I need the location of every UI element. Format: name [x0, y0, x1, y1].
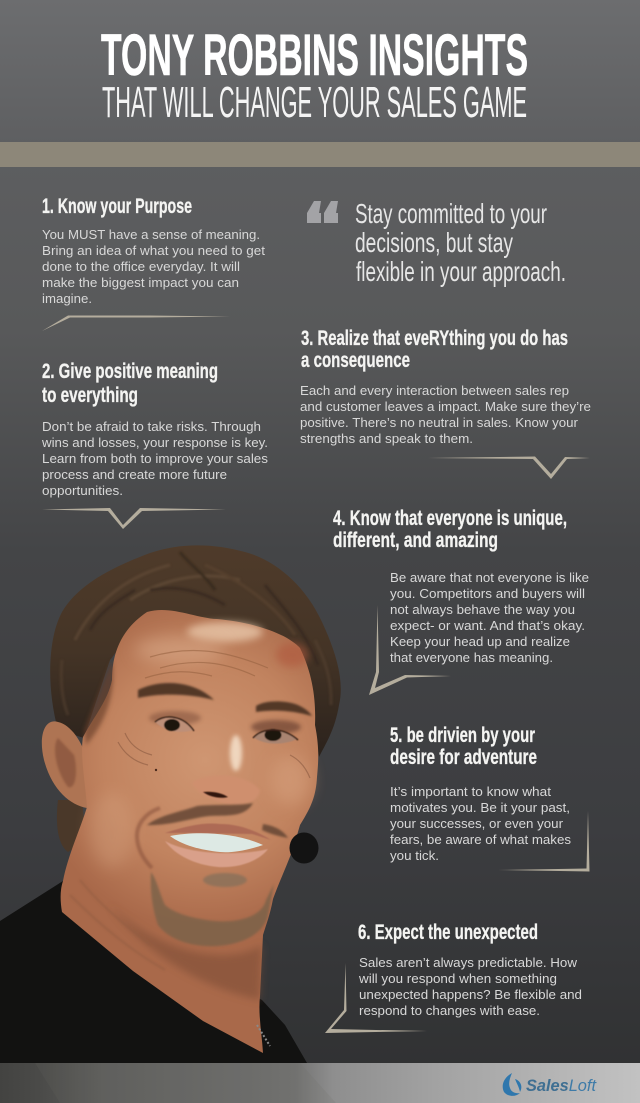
panel: 2 give positive meaning: Don’t be afraid to take risks. Through: [42, 420, 261, 434]
panel: 4 everyone is unique: not always behave the way you: [390, 603, 575, 617]
left eye: [155, 717, 194, 732]
upper lip: [165, 823, 271, 840]
panel: 5 desire for adventure: motivates you. Be it your past,: [390, 801, 570, 815]
back hair: [57, 800, 86, 852]
header band: [0, 142, 640, 167]
right cheek: [270, 755, 310, 805]
panel: 4 everyone is unique: different, and amazing: [333, 529, 498, 552]
face and neck skin: [61, 610, 318, 1053]
panel: 3 realize everything has a consequence: [300, 327, 591, 479]
panel: 5 desire for adventure: It’s important to know what: [390, 785, 552, 799]
footer portrait ghost: [35, 1063, 336, 1103]
panel: 3 realize everything has a consequence: Each and every interaction between sales rep: [300, 384, 569, 398]
SalesLoft logo: SalesLoft: [526, 1076, 597, 1095]
necklace: [257, 1025, 270, 1046]
panel: 5 desire for adventure: you tick.: [390, 849, 439, 863]
temple shadow: [84, 660, 113, 745]
under-chin shadow: [110, 905, 262, 1000]
pull quote: Stay committed to your: [355, 198, 547, 229]
panel: 1 know your purpose: done to the office everyday. It will: [42, 260, 240, 274]
eye sockets: [149, 711, 201, 725]
panel: 4 everyone is unique: Be aware that not everyone is like: [390, 571, 589, 585]
hair: [50, 545, 341, 757]
panel: 2 give positive meaning: wins and losses, your response is key.: [41, 436, 268, 450]
panel: 6 expect the unexpected: Sales aren’t always predictable. How: [359, 956, 578, 970]
title: [101, 23, 528, 127]
nostrils: [203, 792, 228, 798]
panel: 2 give positive meaning: Learn from both to improve your sales: [42, 452, 268, 466]
pull quote: [355, 198, 566, 287]
panel: 6 expect the unexpected: respond to changes with ease.: [359, 1004, 540, 1018]
right eye: [253, 729, 298, 744]
panel: 2 give positive meaning: process and create more future: [42, 468, 227, 482]
mustache: [147, 803, 253, 825]
panel: 4 everyone is unique: Keep your head up and realize: [390, 635, 570, 649]
forehead glow: [135, 636, 225, 664]
forehead highlight: [187, 622, 263, 642]
panel: 2 give positive meaning: to everything: [42, 384, 138, 407]
panel: 6 expect the unexpected: 6. Expect the unexpected: [358, 921, 538, 944]
panel: 4 everyone is unique: [333, 507, 589, 695]
stubble goatee: [151, 872, 274, 946]
neck lines: [70, 880, 165, 970]
panel: 6 expect the unexpected: [325, 921, 582, 1033]
panel: 5 desire for adventure: [390, 724, 590, 872]
temple red: [276, 643, 308, 667]
lower lip: [165, 841, 268, 867]
nose highlight: [230, 735, 242, 771]
panel: 5 desire for adventure: your successes, or even your: [390, 817, 563, 831]
panel: 3 realize everything has a consequence: positive. There’s no neutral in sales. Know your: [300, 416, 578, 430]
icon: droplet: [503, 1073, 521, 1096]
panel: 4 everyone is unique: you. Competitors and buyers will: [390, 587, 585, 601]
smile crease: [137, 808, 160, 868]
panel: 5 desire for adventure: desire for adventure: [390, 746, 537, 769]
lower-left cheek light: [90, 792, 134, 868]
panel: 4 everyone is unique: expect- or want. And that’s okay.: [390, 619, 585, 633]
panel: 1 know your purpose: You MUST have a sense of meaning.: [42, 228, 260, 242]
microphone: [290, 832, 318, 864]
panel: 1 know your purpose: 1. Know your Purpose: [42, 195, 192, 218]
panel: 3 realize everything has a consequence: and customer leaves a impact. Make sure they’re: [300, 400, 591, 414]
hair strands: [61, 552, 331, 715]
panel: 6 expect the unexpected: will you respond when something: [358, 972, 557, 986]
panel: 5 desire for adventure: fears, be aware of what makes: [390, 833, 571, 847]
panel: 1 know your purpose: [42, 195, 266, 331]
mole: [155, 769, 157, 771]
panel: 5 desire for adventure: 5. be drivien by your: [390, 724, 535, 747]
panel: 1 know your purpose: imagine.: [42, 292, 92, 306]
panel: 2 give positive meaning: opportunities.: [42, 484, 123, 498]
pull quote: decisions, but stay: [355, 227, 513, 258]
panel: 1 know your purpose: Bring an idea of what you need to get: [42, 244, 266, 258]
jacket and shirt: [0, 881, 307, 1063]
teeth: [170, 833, 263, 852]
footer bar: [0, 1063, 640, 1103]
crow's feet: [118, 733, 310, 778]
SalesLoft logo: [503, 1073, 597, 1096]
panel: 3 realize everything has a consequence: strengths and speak to them.: [300, 432, 473, 446]
portrait of Tony Robbins: [0, 545, 341, 1063]
panel: 4 everyone is unique: that everyone has meaning.: [390, 651, 553, 665]
panel: 6 expect the unexpected: unexpected happens? Be flexible and: [359, 988, 582, 1002]
quote mark icon: [307, 201, 338, 223]
soul patch: [203, 873, 247, 887]
panel: 3 realize everything has a consequence: a consequence: [301, 349, 410, 372]
panel: 2 give positive meaning: [41, 360, 268, 529]
ear: [42, 721, 90, 808]
nose: [192, 775, 260, 804]
panel: 2 give positive meaning: 2. Give positive meaning: [42, 360, 218, 383]
panel: 1 know your purpose: make the biggest impact you can: [42, 276, 239, 290]
eyebrows: [138, 683, 214, 700]
forehead wrinkles: [145, 650, 268, 678]
